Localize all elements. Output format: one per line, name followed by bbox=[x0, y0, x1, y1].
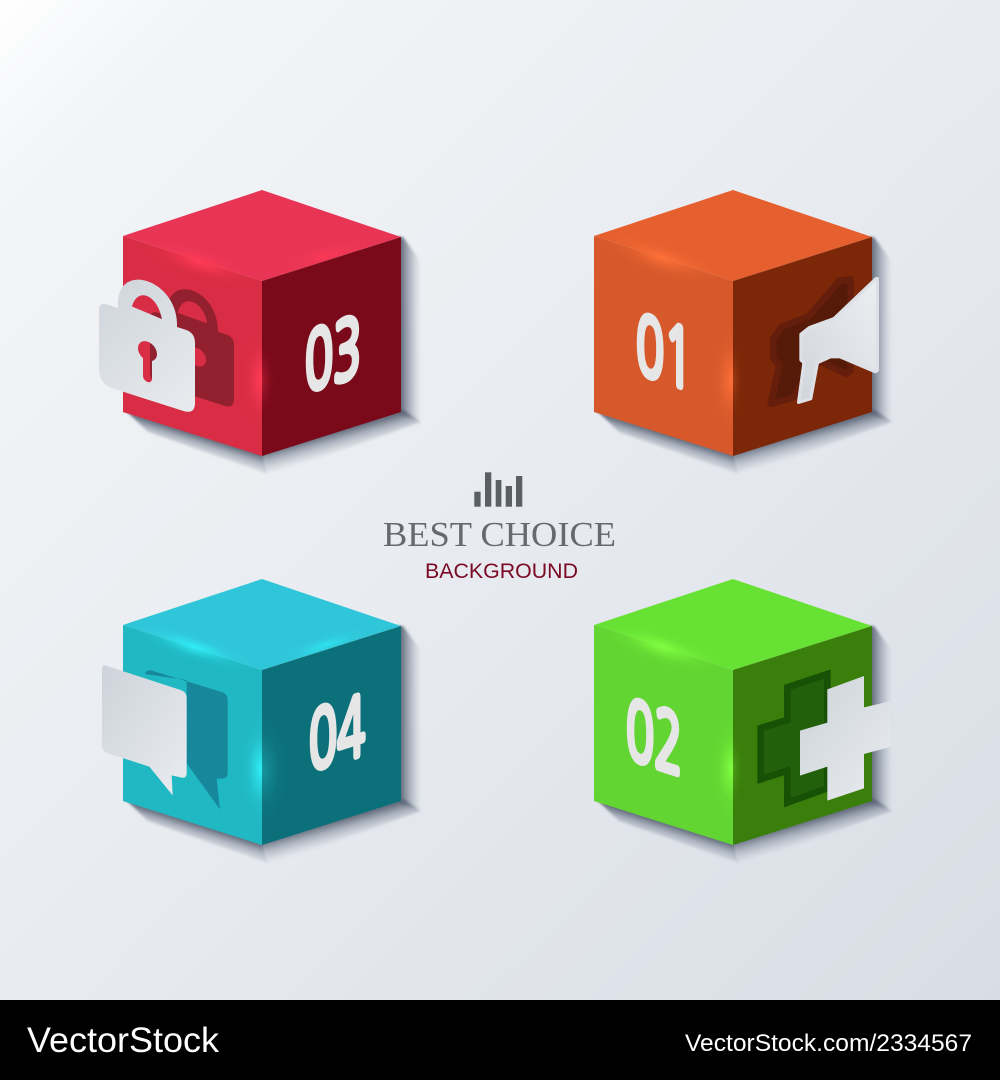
icon: cross bbox=[800, 676, 891, 801]
icon: megaphone shadow bbox=[771, 279, 851, 404]
panel: cube 04 cyan bbox=[102, 579, 421, 865]
panel: cube 01 orange bbox=[594, 190, 892, 476]
footer image id: VectorStock.com/2334567 bbox=[685, 1030, 972, 1057]
cube faces bbox=[123, 579, 401, 845]
icon: speech bubble bbox=[102, 665, 187, 795]
icon: cross shadow bbox=[761, 674, 827, 803]
cube faces bbox=[594, 579, 872, 845]
cube shadow bbox=[594, 237, 892, 476]
icon: megaphone bbox=[799, 279, 877, 402]
number 01: 01 bbox=[636, 303, 692, 402]
footer bar bbox=[0, 1000, 1000, 1080]
icon: speech bubble shadow bbox=[145, 670, 228, 809]
footer brand: VectorStock bbox=[27, 1021, 220, 1060]
panel: cube 02 green bbox=[594, 579, 892, 865]
subtitle: BACKGROUND bbox=[425, 560, 578, 583]
cube shadow bbox=[123, 237, 421, 476]
cube faces bbox=[594, 190, 872, 456]
cube shadow bbox=[594, 626, 892, 865]
title: BEST CHOICE bbox=[383, 516, 616, 554]
panel: cube 03 red bbox=[99, 190, 421, 476]
number 03: 03 bbox=[305, 305, 361, 404]
cube faces bbox=[123, 190, 401, 456]
icon: bar chart logo bbox=[474, 472, 522, 507]
number 04: 04 bbox=[309, 684, 365, 783]
number 02: 02 bbox=[626, 688, 682, 787]
icon: padlock bbox=[99, 266, 195, 415]
cube shadow bbox=[123, 626, 421, 865]
icon: padlock shadow bbox=[150, 277, 234, 409]
